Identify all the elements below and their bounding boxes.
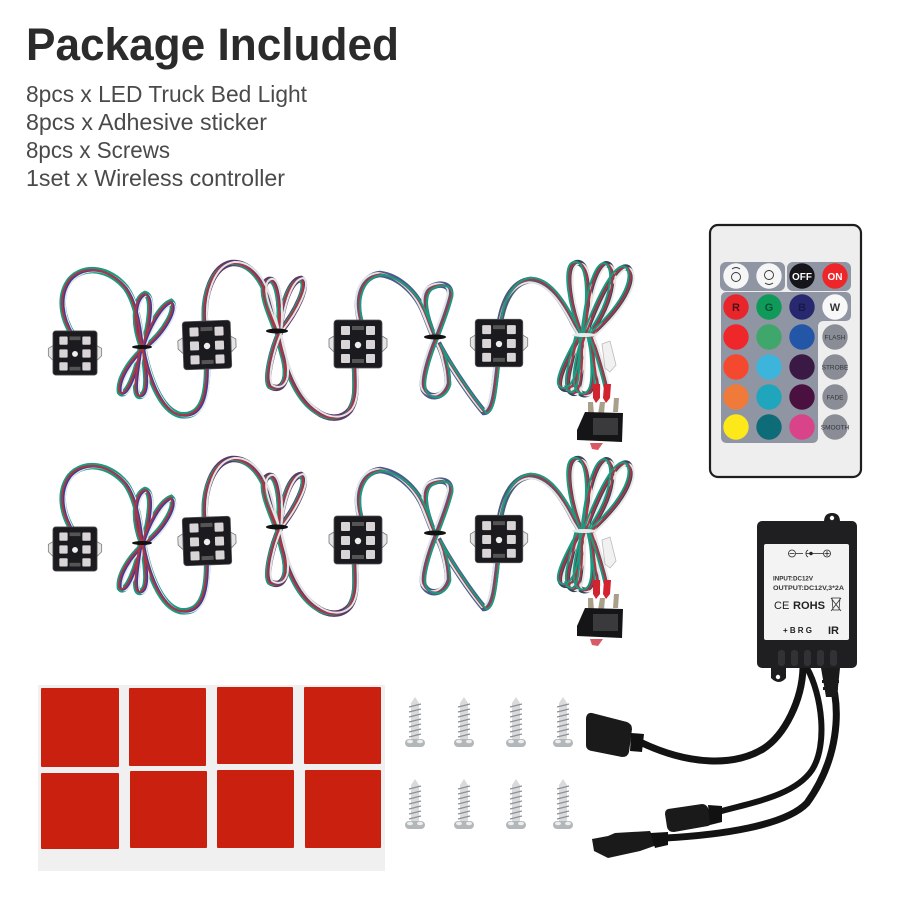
RGBW buttons: B (798, 302, 806, 314)
controller cables (640, 668, 836, 838)
cable strain relief (821, 668, 840, 697)
package contents list (26, 81, 308, 191)
mode buttons: STROBE (822, 364, 849, 372)
red terminals (593, 384, 611, 403)
mode buttons: FADE (827, 394, 844, 402)
screw 6 (454, 779, 474, 829)
package contents list: 8pcs x Screws (26, 137, 170, 163)
connector 3 (592, 831, 668, 858)
controller label (764, 544, 849, 640)
LED light set, second row (48, 458, 634, 646)
certification marks: ROHS (793, 600, 825, 612)
mode buttons (821, 324, 850, 440)
cable ties (132, 328, 596, 349)
connector 2 (665, 804, 722, 832)
RGBW buttons: G (765, 302, 773, 314)
RGBW buttons: W (830, 302, 841, 314)
remote body (710, 225, 861, 477)
screws (405, 697, 573, 829)
wireless remote controller (710, 225, 861, 477)
power buttons: OFF (792, 272, 812, 283)
mode buttons: SMOOTH (821, 424, 850, 432)
package contents list: 1set x Wireless controller (26, 165, 285, 191)
screw 1 (405, 697, 425, 747)
RGBW buttons: R (732, 302, 740, 314)
RGBW buttons (723, 294, 848, 320)
screw 7 (506, 779, 526, 829)
power buttons (789, 263, 848, 289)
RGB controller box with cables (586, 513, 857, 858)
screw 8 (553, 779, 573, 829)
power buttons: ON (828, 272, 842, 283)
controller mounting tabs (771, 513, 840, 682)
LED module 1 (48, 331, 102, 375)
colour buttons (723, 324, 815, 440)
rocker switch (577, 398, 623, 450)
voltage ratings: INPUT:DC12V (773, 576, 814, 582)
backing sheet (38, 685, 385, 871)
LED module 3 (329, 320, 387, 368)
screw 4 (553, 697, 573, 747)
screw 3 (506, 697, 526, 747)
LED module 4 (470, 319, 528, 367)
brightness buttons (723, 263, 782, 289)
package contents list: 8pcs x Adhesive sticker (26, 109, 267, 135)
pin labels (783, 625, 839, 637)
package contents list: 8pcs x LED Truck Bed Light (26, 81, 308, 107)
red adhesive pads (41, 687, 381, 849)
screw 5 (405, 779, 425, 829)
pin labels: IR (828, 625, 839, 637)
certification marks (774, 598, 841, 612)
inline plug (602, 341, 616, 372)
LED light set, first row (48, 262, 634, 450)
title: Package Included (26, 19, 399, 70)
adhesive sticker sheet (38, 685, 385, 871)
colour button panel (721, 292, 851, 443)
power button panel (787, 262, 851, 291)
polarity symbol (788, 550, 830, 557)
connector 1 (586, 713, 644, 757)
controller ribs (778, 650, 837, 666)
pin labels: + B R G (783, 626, 812, 635)
wire ribbons (62, 262, 634, 419)
voltage ratings (773, 576, 844, 592)
LED module 2 (177, 320, 237, 370)
voltage ratings: OUTPUT:DC12V,3*2A (773, 585, 844, 592)
certification marks: CE (774, 600, 789, 612)
controller body (757, 521, 857, 668)
mode buttons: FLASH (825, 334, 846, 342)
screw 2 (454, 697, 474, 747)
brightness button panel (720, 262, 785, 291)
